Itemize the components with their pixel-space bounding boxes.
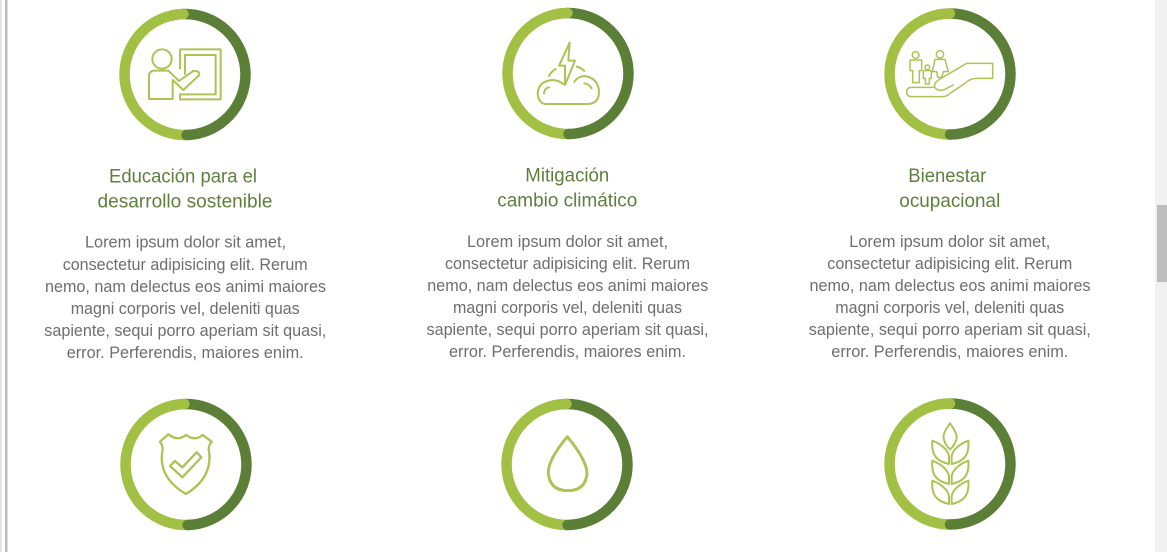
body text: nemo, nam delectus eos animi maiores [45, 277, 326, 296]
heading: desarrollo sostenible [98, 190, 272, 212]
body text: Lorem ipsum dolor sit amet, [467, 232, 668, 251]
ring with icon: shield [124, 402, 248, 527]
icon: teacher at board [149, 49, 221, 99]
ring with icon: water [506, 403, 628, 526]
body text: error. Perferendis, maiores enim. [67, 343, 304, 362]
body text: error. Perferendis, maiores enim. [449, 342, 686, 361]
body text: magni corporis vel, deleniti quas [835, 298, 1064, 317]
ring: water [506, 403, 628, 526]
scrollbar [1155, 0, 1167, 552]
body text: nemo, nam delectus eos animi maiores [810, 276, 1090, 295]
icon: water drop [548, 437, 587, 491]
body text: Lorem ipsum dolor sit amet, [849, 232, 1050, 251]
body text [809, 232, 1091, 361]
body text: Lorem ipsum dolor sit amet, [85, 232, 286, 252]
body text: nemo, nam delectus eos animi maiores [427, 276, 708, 295]
body text: sapiente, sequi porro aperiam sit quasi, [426, 320, 708, 339]
ring: educación [123, 12, 247, 137]
icon: cloud and lightning [538, 43, 599, 104]
body text [426, 232, 708, 361]
heading: ocupacional [899, 190, 1000, 212]
ring: wheat [890, 404, 1010, 524]
body text: sapiente, sequi porro aperiam sit quasi, [809, 320, 1091, 339]
body text: consectetur adipisicing elit. Rerum [445, 254, 690, 273]
heading: Mitigación [525, 164, 609, 186]
heading: Educación para el [109, 166, 257, 188]
heading [899, 165, 1000, 212]
body text: magni corporis vel, deleniti quas [453, 298, 682, 317]
panel: bienestar [809, 14, 1091, 361]
heading [98, 166, 272, 212]
panel: mitigación [426, 12, 708, 361]
heading [497, 164, 637, 212]
ring with icon: wheat [890, 404, 1010, 524]
body text: error. Perferendis, maiores enim. [831, 342, 1068, 361]
heading: cambio climático [497, 190, 637, 212]
icon: shield with check [160, 434, 212, 494]
icon: family on hand [907, 51, 993, 97]
heading: Bienestar [908, 165, 987, 187]
body text: consectetur adipisicing elit. Rerum [827, 254, 1072, 273]
panel: educación [44, 12, 326, 362]
icon: wheat ear [932, 423, 968, 504]
body text: consectetur adipisicing elit. Rerum [63, 255, 308, 274]
ring: shield [124, 402, 248, 527]
body text [44, 232, 326, 362]
body text: magni corporis vel, deleniti quas [71, 299, 300, 318]
ring: mitigación [507, 12, 629, 135]
ring: bienestar [890, 14, 1010, 134]
body text: sapiente, sequi porro aperiam sit quasi, [44, 321, 326, 340]
